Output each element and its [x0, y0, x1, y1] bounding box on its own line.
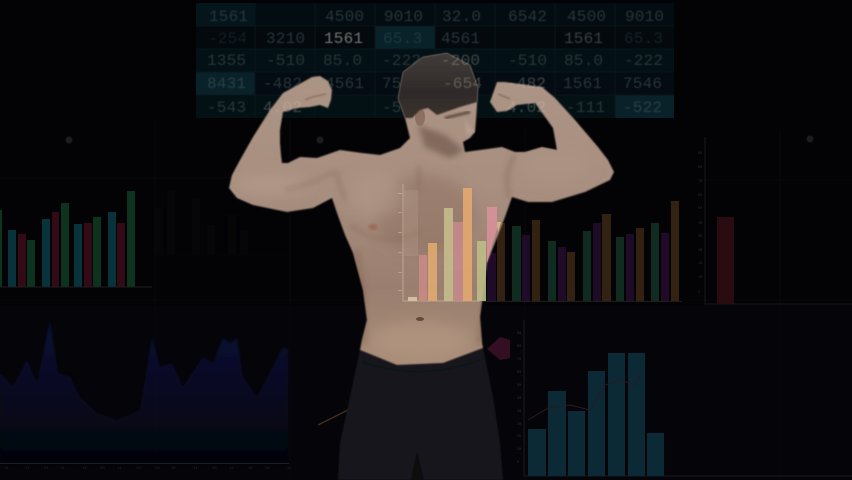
bottom right axis ticks: 15 — [517, 435, 521, 439]
knuckle detail — [305, 94, 510, 100]
table numbers: 9010 — [625, 8, 664, 26]
area chart axis labels: 21 — [44, 467, 49, 471]
trend line — [528, 375, 640, 420]
table numbers: 6542 — [508, 8, 547, 26]
table numbers: -522 — [623, 99, 662, 117]
area chart axis labels: 15 — [171, 467, 176, 471]
table numbers: 3210 — [266, 30, 305, 48]
area chart axis labels: 16 — [212, 467, 217, 471]
torso and arms — [229, 53, 614, 365]
far right axis ticks: 70 — [698, 180, 702, 184]
face and stubble — [418, 125, 464, 158]
table numbers: 85.0 — [564, 52, 603, 70]
table numbers: 85.0 — [323, 52, 362, 70]
area chart axis labels: 11 — [82, 467, 87, 471]
bottom right axis ticks: 70 — [517, 358, 521, 362]
icon: magenta marker — [487, 337, 510, 360]
table numbers: -522 — [382, 99, 421, 117]
far right axis ticks: 10 — [698, 276, 702, 280]
table numbers: 4500 — [567, 8, 606, 26]
panel: overlaid torso bar chart — [398, 184, 501, 301]
table numbers: -510 — [266, 52, 305, 70]
area chart axis labels: 30 — [100, 467, 105, 471]
bottom right axis ticks: 5 — [517, 461, 519, 465]
bottom right axis ticks: 30 — [517, 410, 521, 414]
table numbers: 1561 — [563, 75, 602, 93]
table numbers: 9010 — [384, 8, 423, 26]
far right axis ticks: 40 — [698, 222, 702, 226]
far right axis ticks — [698, 152, 702, 295]
bottom right axis ticks: 80 — [517, 345, 521, 349]
table numbers: 65.3 — [383, 30, 422, 48]
area chart axis labels: 11 — [4, 467, 9, 471]
table numbers: 1561 — [564, 30, 603, 48]
table numbers over figure: -482 — [507, 75, 546, 93]
area chart axis labels: 15 — [248, 467, 253, 471]
table numbers: -254 — [208, 30, 247, 48]
table numbers over figure — [263, 52, 546, 117]
table numbers: 1561 — [209, 8, 248, 26]
far right axis ticks: 15 — [698, 262, 702, 266]
muscle shading — [380, 144, 558, 364]
far right axis ticks: 60 — [698, 194, 702, 198]
hair — [398, 53, 478, 118]
bottom right axis ticks: 50 — [517, 384, 521, 388]
bottom right axis ticks: 20 — [517, 423, 521, 427]
torso chart ticks — [398, 193, 402, 291]
table numbers: 1355 — [207, 52, 246, 70]
panel: left bar chart — [0, 191, 152, 287]
panel: data table — [196, 3, 674, 118]
area chart axis labels: 11 — [117, 467, 122, 471]
table numbers: -510 — [508, 52, 547, 70]
table numbers: -222 — [624, 52, 663, 70]
bottom right axis ticks: 10 — [517, 448, 521, 452]
table numbers: 4500 — [325, 8, 364, 26]
table numbers: -111 — [566, 99, 605, 117]
area chart axis labels: 14 — [155, 467, 160, 471]
table numbers: -543 — [207, 99, 246, 117]
area chart axis labels: 16 — [265, 467, 270, 471]
area chart axis labels: 11 — [60, 467, 65, 471]
area chart axis labels: 11 — [193, 467, 198, 471]
panel: right bar chart — [403, 201, 682, 302]
table numbers: 4561 — [441, 30, 480, 48]
table numbers: 8431 — [207, 75, 246, 93]
icon: grey dots — [66, 136, 814, 144]
bottom right axis ticks — [517, 332, 521, 465]
table numbers: 65.3 — [624, 30, 663, 48]
far right axis ticks: 90 — [698, 152, 702, 156]
table numbers: -482 — [263, 75, 302, 93]
figure: flexing man — [229, 53, 614, 480]
table numbers: 7546 — [623, 75, 662, 93]
bottom right axis ticks: 90 — [517, 332, 521, 336]
far right axis ticks: 50 — [698, 207, 702, 211]
table numbers: 4561 — [325, 75, 364, 93]
table numbers: 32.0 — [442, 8, 481, 26]
far right axis ticks: 20 — [698, 249, 702, 253]
area chart axis labels: 14 — [229, 467, 234, 471]
far right axis ticks: 80 — [698, 166, 702, 170]
table numbers over figure: -200 — [441, 52, 480, 70]
table numbers — [207, 8, 664, 117]
far right axis ticks: 30 — [698, 235, 702, 239]
table numbers over figure: -654 — [443, 75, 482, 93]
panel: bottom right bar chart — [517, 320, 852, 476]
area chart axis labels — [4, 467, 292, 471]
area chart — [0, 320, 292, 471]
shorts — [338, 348, 503, 480]
table numbers: -222 — [382, 52, 421, 70]
area chart axis labels: 11 — [287, 467, 292, 471]
bottom right axis ticks: 40 — [517, 397, 521, 401]
table numbers over figure: 4.02 — [263, 99, 302, 117]
area chart axis labels: 17 — [25, 467, 30, 471]
area chart axis labels: 13 — [136, 467, 141, 471]
table numbers: 7546 — [382, 75, 421, 93]
table numbers: 1561 — [324, 30, 363, 48]
table numbers over figure: 4.02 — [507, 99, 546, 117]
bottom right axis ticks: 60 — [517, 371, 521, 375]
panel: faint middle bars — [155, 190, 295, 255]
panel: lower background tint — [0, 120, 852, 480]
table highlighted cells — [196, 3, 674, 118]
far right axis ticks: 5 — [698, 291, 700, 295]
panel: far right chart — [698, 137, 852, 304]
icon: orange trend stroke — [318, 407, 354, 425]
